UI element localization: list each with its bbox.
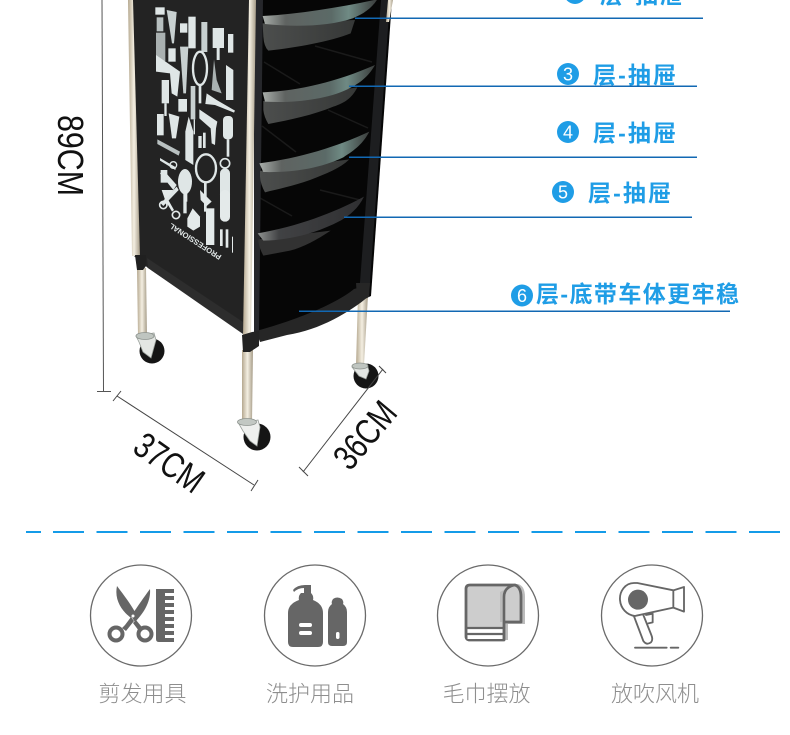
- leader line: layer 4: [349, 156, 697, 158]
- right foot: [356, 283, 370, 297]
- panel tool pattern lower: [160, 190, 233, 262]
- drawer 4: [259, 132, 369, 192]
- icon: scissors and comb: [90, 565, 192, 666]
- width label: 37CM: [126, 424, 212, 501]
- dashed divider: [26, 531, 780, 533]
- label: layer 6: 层-底带车体更牢稳: [536, 281, 739, 307]
- drawer 5: [258, 197, 364, 256]
- inner left frame column: [254, 0, 263, 335]
- front foot: [242, 331, 259, 352]
- middle pole: [243, 0, 256, 336]
- right wheel: [352, 363, 378, 388]
- left foot: [135, 255, 146, 270]
- rear left leg: [137, 268, 147, 336]
- label: layer 5: 层-抽屉: [588, 180, 671, 206]
- right silver edge: [386, 0, 393, 22]
- drawers: [258, 0, 377, 256]
- side panel: [131, 0, 250, 334]
- caption: hair dryer storage: 放吹风机: [611, 682, 699, 706]
- icon: towel: [438, 565, 538, 666]
- left pole: [128, 0, 140, 256]
- side panel bottom strip: [147, 258, 243, 334]
- drawer unit interior: [254, 0, 392, 336]
- label: layer 6: 6: [517, 286, 527, 306]
- front wheel: [238, 418, 270, 450]
- middle leg: [242, 350, 253, 422]
- drawer 3: [263, 65, 375, 124]
- label: layer 4: 层-抽屉: [593, 120, 676, 146]
- leader line: layer 3: [349, 86, 697, 87]
- depth dimension line: [299, 366, 386, 476]
- label: layer 4: [557, 120, 676, 146]
- caption: towel storage: 毛巾摆放: [442, 682, 531, 706]
- right frame post: [359, 0, 390, 296]
- label: layer 5: 5: [558, 182, 568, 202]
- height label: 89CM: [50, 115, 91, 196]
- depth label: 36CM: [325, 393, 405, 477]
- caption: cutting tools: 剪发用具: [98, 682, 187, 706]
- leader line: layer 6: [299, 310, 730, 312]
- icon: hair dryer: [602, 565, 702, 666]
- leader line: layer 2: [355, 18, 703, 19]
- left wheel: [136, 332, 164, 364]
- icon: shampoo bottles: [264, 565, 366, 666]
- height dimension line: [97, 0, 111, 392]
- caption: washing products: 洗护用品: [266, 682, 354, 706]
- width dimension line: [113, 391, 258, 491]
- shelf back lines: [260, 46, 372, 216]
- leader line: layer 5: [344, 216, 692, 218]
- bottom plate: [256, 285, 369, 342]
- label: layer 4: 4: [563, 122, 573, 142]
- cart photo: [128, 0, 393, 450]
- label: layer 3: [557, 62, 676, 88]
- label: layer 5: [552, 180, 671, 206]
- panel tool pattern: [155, 7, 235, 213]
- PROFESSIONAL logo text: PROFESSIONAL: [167, 221, 223, 262]
- label: layer 2: [564, 0, 683, 8]
- rear right leg: [356, 295, 368, 365]
- label: layer 3: 3: [563, 64, 573, 84]
- drawer 2: [263, 0, 377, 51]
- label: layer 3: 层-抽屉: [593, 62, 676, 88]
